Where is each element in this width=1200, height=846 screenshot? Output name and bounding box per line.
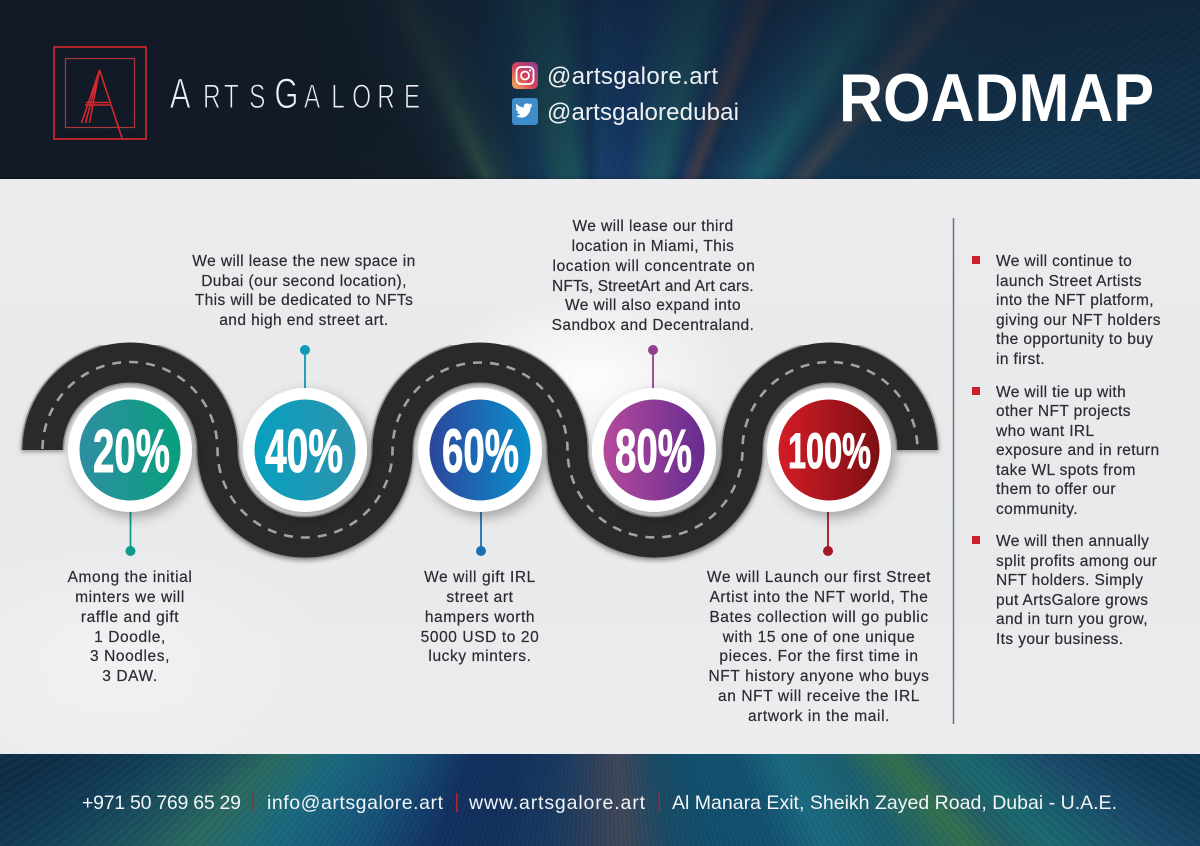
- badge: 20%: 20%: [93, 417, 170, 485]
- connector: 40%: [300, 345, 310, 392]
- text: 20% milestone: 3 Noodles,: [90, 648, 170, 665]
- text: 80% milestone: We will lease our third: [572, 218, 734, 235]
- social handles: [512, 62, 739, 126]
- connector: 80%: [648, 345, 658, 392]
- text: 80% milestone: Sandbox and Decentraland.: [552, 317, 754, 334]
- bullet: street artists: giving our NFT holders: [996, 312, 1161, 329]
- bullet: profit split: We will then annually: [996, 533, 1149, 550]
- badge: 40%: 40%: [265, 417, 343, 485]
- text: 100% milestone: Bates collection will go public: [709, 609, 929, 626]
- text: 40% milestone: This will be dedicated to NFTs: [195, 292, 413, 309]
- text: 100% milestone: with 15 one of one unique: [722, 629, 915, 646]
- bullet: profit split: put ArtsGalore grows: [996, 592, 1148, 609]
- footer contact line: www.artsgalore.art: [468, 792, 646, 814]
- header background: [0, 0, 1200, 179]
- connector: 100%: [823, 510, 833, 556]
- badge: 40%: [243, 388, 367, 512]
- icon: twitter: [512, 98, 538, 125]
- logo wordmark: G: [274, 69, 298, 117]
- text: 100% milestone: [707, 569, 931, 725]
- badge: 20%: [68, 388, 192, 512]
- footer contact line: info@artsgalore.art: [267, 792, 444, 814]
- logo wordmark: RTS: [203, 78, 265, 116]
- text: 20% milestone: [68, 569, 192, 685]
- badge: 80%: 80%: [615, 417, 692, 485]
- text: 80% milestone: We will also expand into: [565, 297, 741, 314]
- bullet: partnerships: who want IRL: [995, 423, 1094, 440]
- text: 100% milestone: We will Launch our first Street: [707, 569, 931, 586]
- main panel background: [0, 179, 1200, 754]
- divider: [952, 218, 954, 724]
- text: 40% milestone: [192, 253, 416, 329]
- bullet: profit split: split profits among our: [996, 553, 1157, 570]
- bullet: street artists: We will continue to: [996, 253, 1132, 270]
- badge: 100%: [767, 388, 891, 512]
- text: 100% milestone: pieces. For the first time in: [719, 648, 919, 665]
- text: 60% milestone: lucky minters.: [428, 648, 532, 665]
- badge: 60%: 60%: [442, 417, 519, 485]
- bullet: profit split: Its your business.: [996, 631, 1123, 648]
- bullet: profit split: NFT holders. Simply: [996, 572, 1143, 589]
- bullet: partnerships: community.: [996, 501, 1078, 518]
- text: 60% milestone: [421, 569, 539, 665]
- logo wordmark: ALORE: [304, 78, 420, 116]
- text: 80% milestone: location in Miami, This: [572, 238, 734, 255]
- text: 100% milestone: an NFT will receive the IRL: [718, 688, 920, 705]
- bullet: street artists: into the NFT platform,: [996, 292, 1154, 309]
- title: ROADMAP: [839, 60, 1154, 136]
- bullet: street artists: the opportunity to buy: [996, 331, 1153, 348]
- text: 100% milestone: artwork in the mail.: [748, 708, 890, 725]
- text: 40% milestone: We will lease the new space in: [192, 253, 416, 270]
- connector: 20%: [126, 510, 136, 556]
- text: 80% milestone: NFTs, StreetArt and Art cars.: [552, 278, 754, 295]
- handle: twitter: @artsgaloredubai: [547, 99, 739, 126]
- text: 20% milestone: 1 Doodle,: [94, 629, 166, 646]
- connector: 60%: [476, 510, 486, 556]
- bullet: partnerships: them to offer our: [996, 481, 1116, 498]
- text: 60% milestone: We will gift IRL: [424, 569, 536, 586]
- logo mark: [54, 47, 146, 139]
- footer contact line: [82, 792, 1117, 814]
- text: 40% milestone: and high end street art.: [219, 312, 389, 329]
- bullet: partnerships: exposure and in return: [996, 442, 1159, 459]
- text: 80% milestone: [552, 218, 755, 334]
- text: 20% milestone: Among the initial: [68, 569, 192, 586]
- badge: 80%: [592, 388, 716, 512]
- text: 60% milestone: 5000 USD to 20: [421, 629, 539, 646]
- winding road: [42, 362, 918, 538]
- bullet: profit split: and in turn you grow,: [996, 611, 1148, 628]
- footer background: [0, 754, 1200, 846]
- text: 20% milestone: minters we will: [75, 589, 185, 606]
- text: 100% milestone: Artist into the NFT world, The: [709, 589, 929, 606]
- bullet: partnerships: [972, 384, 1159, 518]
- bullet: partnerships: take WL spots from: [996, 462, 1136, 479]
- logo wordmark: A: [170, 69, 191, 117]
- text: 100% milestone: NFT history anyone who buys: [709, 668, 929, 685]
- text: 20% milestone: 3 DAW.: [102, 668, 158, 685]
- icon: instagram: [512, 62, 538, 89]
- footer contact line: +971 50 769 65 29: [82, 792, 241, 814]
- text: 80% milestone: location will concentrate on: [553, 258, 755, 275]
- bullet: partnerships: other NFT projects: [996, 403, 1131, 420]
- handle: instagram: @artsgalore.art: [547, 63, 718, 90]
- text: 20% milestone: raffle and gift: [81, 609, 179, 626]
- badge: 100%: 100%: [788, 423, 871, 479]
- bullet: street artists: [972, 253, 1161, 368]
- bullet: partnerships: We will tie up with: [996, 384, 1126, 401]
- text: 60% milestone: hampers worth: [425, 609, 535, 626]
- bullet: street artists: in first.: [996, 351, 1045, 368]
- badge: 60%: [418, 388, 542, 512]
- footer contact line: Al Manara Exit, Sheikh Zayed Road, Dubai - U.A.E.: [672, 792, 1117, 814]
- bullet: profit split: [972, 533, 1157, 648]
- text: 60% milestone: street art: [446, 589, 514, 606]
- text: 40% milestone: Dubai (our second location),: [201, 273, 407, 290]
- bullet: street artists: launch Street Artists: [996, 273, 1142, 290]
